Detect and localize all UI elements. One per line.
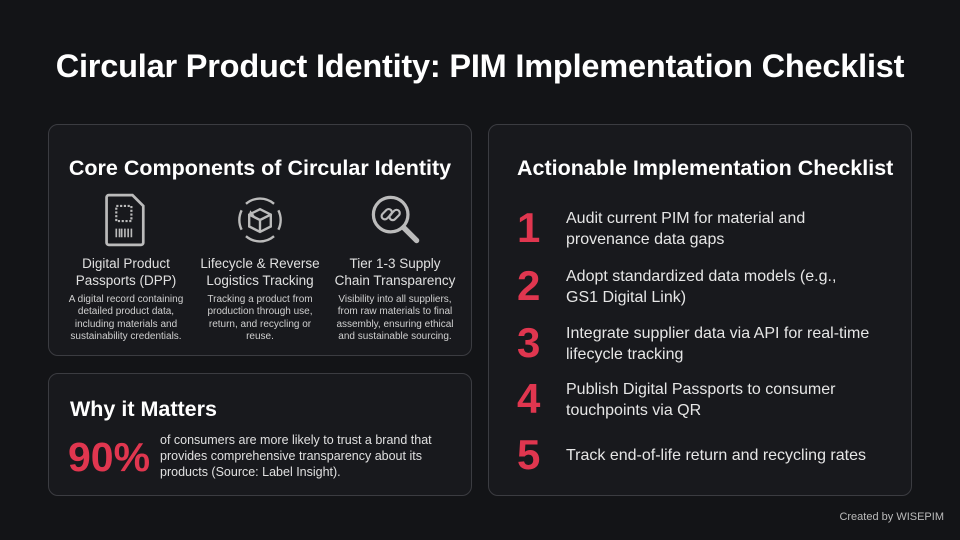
- item 1: [517, 204, 805, 251]
- heading: checklist: Actionable Implementation Checklist: [517, 156, 893, 180]
- component: DPP: A digital record containing detailed product data, including materials and sustainability credentials.: [69, 294, 183, 342]
- panel: why it matters: [48, 373, 472, 496]
- item 2: Adopt standardized data models (e.g., GS1 Digital Link): [566, 268, 836, 306]
- component: lifecycle: Lifecycle & Reverse Logistics Tracking: [200, 256, 320, 288]
- icon: magnifier with link: [372, 196, 420, 244]
- component: supply chain: Visibility into all suppliers, from raw materials to final assembly, ensuring ethical and sustainable sourcing.: [336, 294, 454, 342]
- component: lifecycle: Tracking a product from production through use, return, and recycling or reuse.: [207, 294, 313, 342]
- item 5: [517, 431, 866, 478]
- component: supply chain: Tier 1-3 Supply Chain Transparency: [335, 256, 455, 288]
- item 1: Audit current PIM for material and provenance data gaps: [566, 210, 805, 248]
- item 3: Integrate supplier data via API for real-time lifecycle tracking: [566, 325, 869, 363]
- item 5: Track end-of-life return and recycling rates: [566, 447, 866, 464]
- component: supply chain: [335, 196, 456, 342]
- icon: passport document: [105, 194, 145, 246]
- panel: core components: [48, 124, 472, 356]
- item 2: [517, 262, 836, 309]
- item 2: 2: [517, 262, 540, 309]
- icon: box with cycle arrows: [238, 197, 282, 243]
- component: DPP: Digital Product Passports (DPP): [76, 256, 176, 288]
- heading: why it matters: Why it Matters: [70, 397, 217, 421]
- stat: 90%: 90%: [68, 434, 150, 480]
- component: DPP: [68, 194, 183, 342]
- item 1: 1: [517, 204, 540, 251]
- stat description: of consumers are more likely to trust a brand that provides comprehensive transparency about its products (Source: Label Insight).: [160, 433, 432, 479]
- item 3: 3: [517, 319, 540, 366]
- item 5: 5: [517, 431, 540, 478]
- heading: core components: Core Components of Circular Identity: [69, 156, 451, 180]
- title: Circular Product Identity: PIM Implementation Checklist: [56, 48, 904, 84]
- component: lifecycle: [200, 197, 320, 342]
- item 4: 4: [517, 375, 540, 422]
- panel: checklist: [488, 124, 912, 496]
- item 4: Publish Digital Passports to consumer touchpoints via QR: [566, 381, 835, 419]
- item 4: [517, 375, 836, 422]
- footer credit: Created by WISEPIM: [839, 511, 944, 523]
- item 3: [517, 319, 869, 366]
